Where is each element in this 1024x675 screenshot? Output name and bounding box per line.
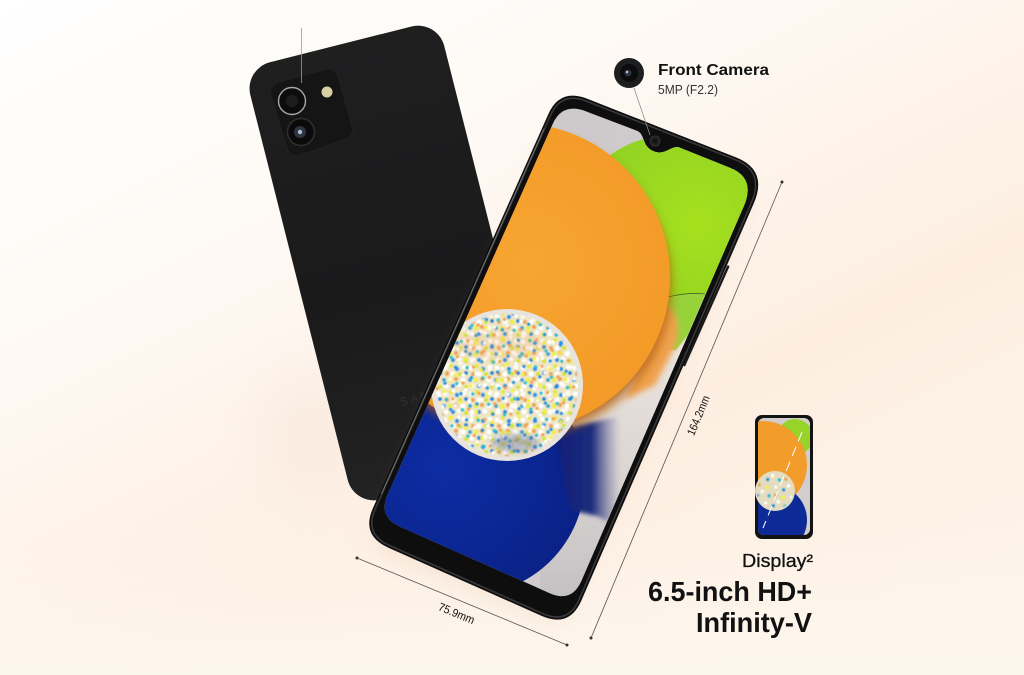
- back phone shadow: [260, 370, 360, 490]
- diagonal dashed arrow: [763, 432, 802, 528]
- back phone body: [244, 20, 548, 506]
- front camera icon: [614, 58, 644, 88]
- second lens: [288, 118, 314, 146]
- front camera callout: [614, 58, 769, 135]
- orange sphere: [428, 127, 670, 420]
- display label: Display²: [742, 551, 813, 571]
- flash: [322, 86, 332, 98]
- height dimension: [590, 180, 784, 640]
- front phone shadow: [365, 102, 759, 632]
- orange shadow: [424, 134, 678, 438]
- back phone: [244, 20, 548, 506]
- display headline: Infinity-V: [696, 607, 812, 638]
- blue sphere: [384, 367, 580, 582]
- notch camera: [650, 136, 660, 146]
- brand mark: SAMSUNG: [399, 377, 475, 409]
- width dimension: 75.9mm: [436, 601, 476, 627]
- phone frame: [361, 80, 772, 628]
- screen wallpaper: [384, 108, 748, 596]
- display headline: 6.5-inch HD+: [648, 576, 812, 607]
- callout heading: Front Camera: [658, 62, 769, 79]
- rear camera callout line: [300, 28, 302, 83]
- camera island: [270, 69, 353, 156]
- glitter grip: [431, 309, 583, 461]
- callout line: [634, 88, 650, 135]
- mini phone icon: [755, 415, 813, 539]
- small orange crescent: [625, 305, 678, 400]
- glitter darker patch: [491, 434, 539, 452]
- glitter orange tint: [452, 329, 548, 361]
- main lens: [278, 88, 306, 114]
- lower pale area: [540, 293, 706, 596]
- front phone: [369, 96, 758, 620]
- height dimension: 164.2mm: [686, 394, 713, 438]
- width dimension: [356, 556, 568, 646]
- callout detail: 5MP (F2.2): [658, 83, 718, 97]
- lower green band: [660, 293, 706, 350]
- green sphere: [610, 139, 748, 344]
- blue shadow: [557, 416, 618, 523]
- display headline: [648, 576, 812, 638]
